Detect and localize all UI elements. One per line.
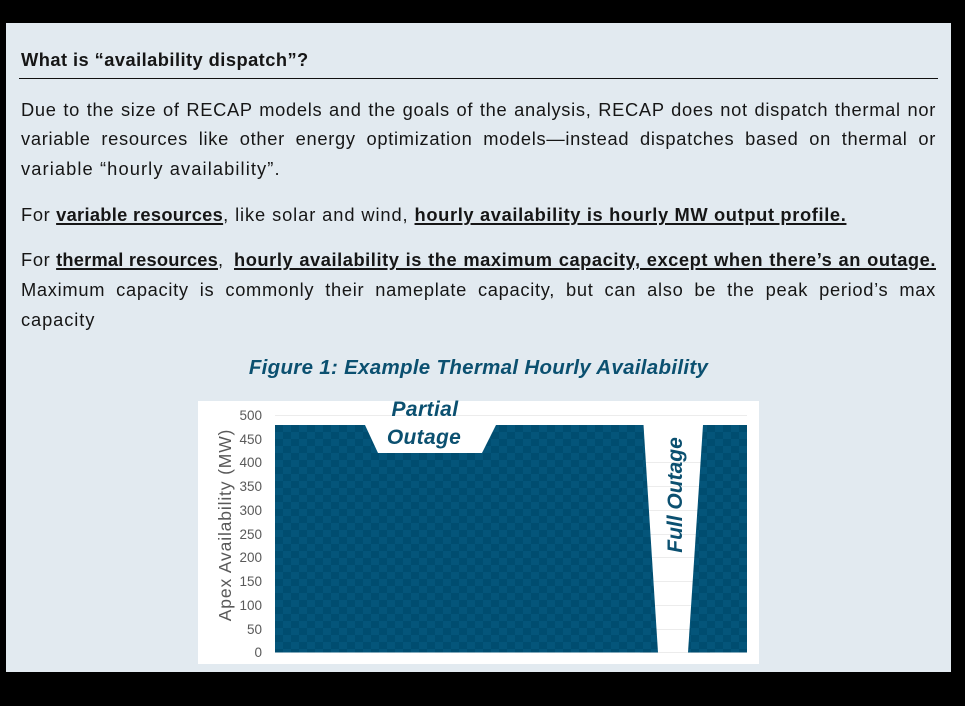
text block: intro paragraph	[21, 99, 936, 179]
text block: variable resources: For variable resources, like solar and wind, hourly availability is hourly MW output profile.	[21, 204, 846, 225]
text block: intro paragraph: variable resources like other energy optimization models—instead dispatches based on thermal or	[21, 128, 936, 149]
text block: thermal resources: Maximum capacity is commonly their nameplate capacity, but can also be the peak period’s max	[21, 279, 936, 300]
y axis labels: 100	[239, 598, 262, 613]
heading rule	[19, 78, 938, 79]
text block: intro paragraph: Due to the size of RECAP models and the goals of the analysis, RECAP does not dispatch thermal nor	[21, 99, 936, 120]
y axis title: Apex Availability (MW)	[215, 429, 235, 621]
text block: intro paragraph: variable “hourly availability”.	[21, 158, 281, 179]
y axis labels: 350	[239, 479, 262, 494]
figure title: Figure 1: Example Thermal Hourly Availability	[249, 356, 708, 379]
y axis labels: 450	[239, 432, 262, 447]
y axis labels: 150	[239, 574, 262, 589]
annotation: full outage: Full Outage	[664, 437, 687, 553]
annotation: partial outage	[387, 398, 461, 449]
annotation: partial outage: Partial	[392, 398, 459, 421]
y axis labels: 50	[247, 622, 262, 637]
text block: thermal resources	[21, 249, 936, 330]
y axis labels: 500	[239, 408, 262, 423]
text block: thermal resources: hourly availability is the maximum capacity, except when there’s an outage.	[234, 249, 936, 270]
y axis labels: 300	[239, 503, 262, 518]
y axis labels: 0	[254, 645, 262, 660]
y axis labels: 250	[239, 527, 262, 542]
heading: What is “availability dispatch”?	[21, 49, 309, 70]
y axis labels: 200	[239, 550, 262, 565]
y axis labels: 400	[239, 455, 262, 470]
annotation: partial outage: Outage	[387, 426, 461, 449]
text block: thermal resources: capacity	[21, 309, 95, 330]
area: availability	[275, 425, 747, 652]
y axis labels	[239, 408, 262, 660]
chart: thermal hourly availability	[198, 398, 759, 664]
text block: thermal resources: For thermal resources,	[21, 249, 224, 270]
